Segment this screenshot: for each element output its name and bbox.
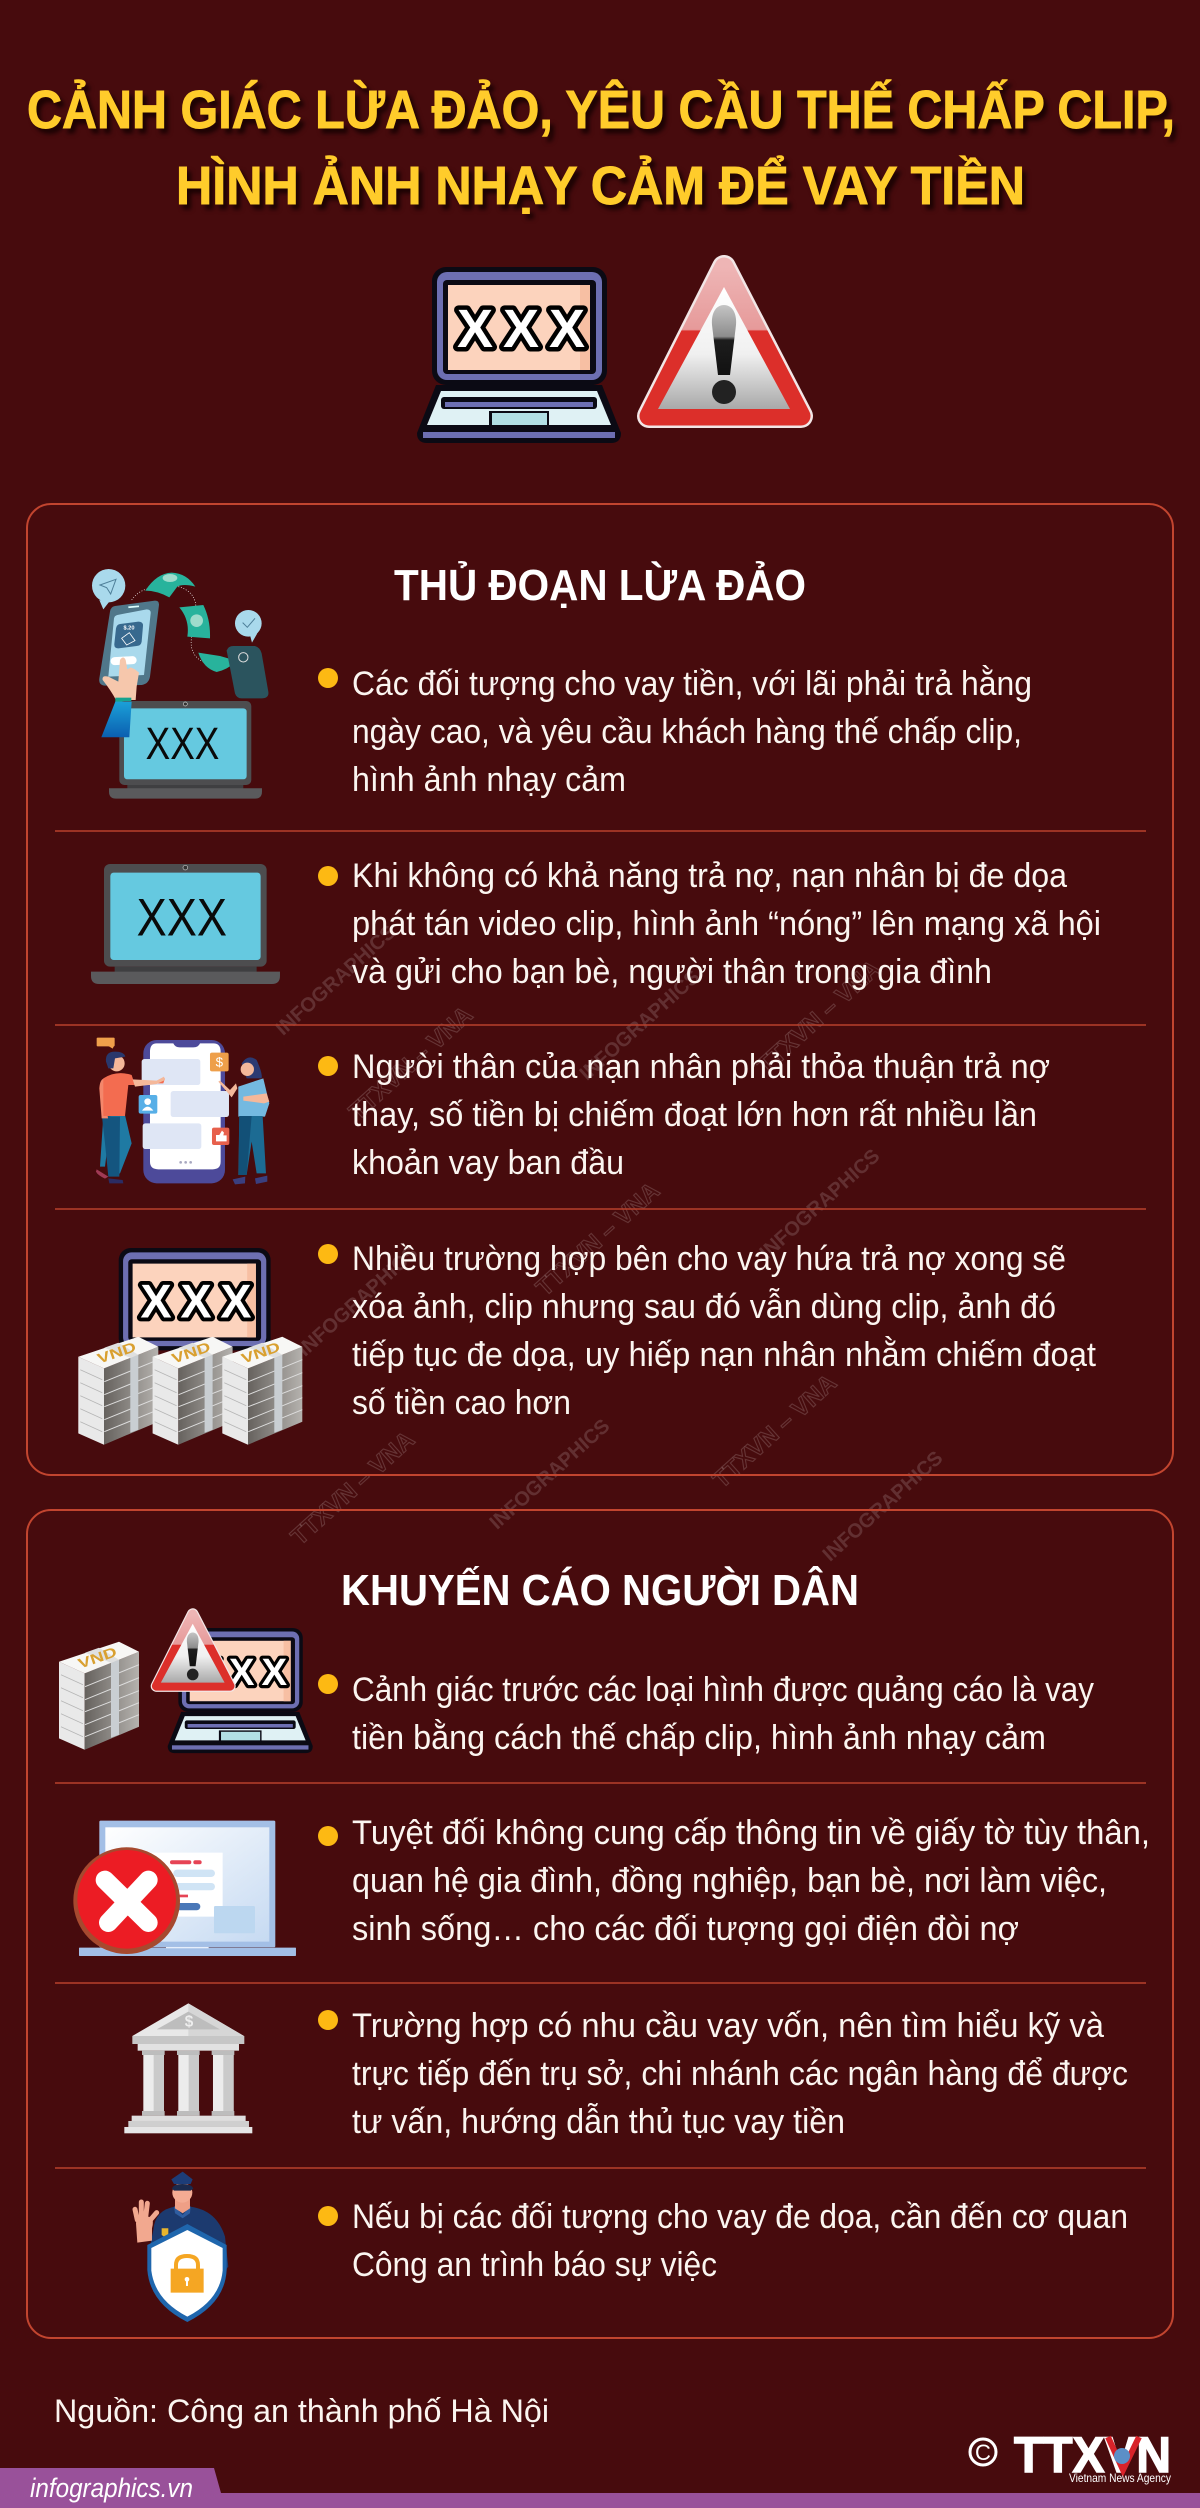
bullet text 4: xóa ảnh, clip nhưng sau đó vẫn dùng clip, ảnh đó (352, 1288, 1056, 1326)
watermarks: TTXVN – VNA (344, 1001, 478, 1126)
watermarks: INFOGRAPHICS (756, 1145, 884, 1264)
logo: TTXVN: Vietnam News Agency (1069, 2471, 1171, 2485)
watermarks: TTXVN – VNA (708, 1369, 842, 1494)
icon: VND stack, laptop and warning: XXX (196, 1651, 288, 1694)
logo: TTXVN: C (975, 2440, 991, 2465)
icon: two people and phone (96, 1038, 269, 1184)
watermarks: TTXVN – VNA (531, 1177, 665, 1302)
bullet text 6: quan hệ gia đình, đồng nghiệp, bạn bè, nơi làm việc, (352, 1862, 1107, 1900)
icon: laptop and VND stacks (78, 1248, 302, 1445)
bullet text 3: khoản vay ban đầu (352, 1144, 624, 1182)
bullet text 7: Trường hợp có nhu cầu vay vốn, nên tìm hiểu kỹ và (352, 2007, 1104, 2045)
bullet text 3: Người thân của nạn nhân phải thỏa thuận trả nợ (352, 1048, 1050, 1086)
watermarks: INFOGRAPHICS (819, 1447, 947, 1566)
icon: laptop with XXX: XXX (457, 299, 585, 359)
bullet text 2: Khi không có khả năng trả nợ, nạn nhân bị đe dọa (352, 857, 1067, 895)
panel: khuyến cáo người dân (27, 1510, 1173, 2338)
icon: laptop form and red cross (73, 1821, 296, 1956)
bullet text 2: và gửi cho bạn bè, người thân trong gia đình (352, 953, 992, 991)
bullet text 4: số tiền cao hơn (352, 1384, 571, 1422)
icon: laptop XXX (91, 864, 280, 984)
watermarks: INFOGRAPHICS (272, 921, 400, 1040)
icon: phone money transfer and laptop: $.20 (123, 626, 134, 632)
bullet text 6 (318, 1814, 1150, 1948)
bullet text 7: trực tiếp đến trụ sở, chi nhánh các ngân hàng để được (352, 2055, 1128, 2093)
bullet text 1 (318, 665, 1032, 799)
bullet text 1: ngày cao, và yêu cầu khách hàng thế chấp clip, (352, 713, 1022, 751)
bullet text 1: hình ảnh nhạy cảm (352, 761, 626, 799)
bullet text 1: Các đối tượng cho vay tiền, với lãi phải trả hằng (352, 665, 1032, 703)
bullet text 7: tư vấn, hướng dẫn thủ tục vay tiền (352, 2103, 845, 2141)
icon: VND stack, laptop and warning (59, 1614, 313, 1753)
icon: laptop and VND stacks: VND (239, 1338, 282, 1367)
heading: khuyến cáo: KHUYẾN CÁO NGƯỜI DÂN (341, 1565, 859, 1615)
icon: laptop XXX: XXX (137, 889, 227, 948)
footer band (0, 2468, 1200, 2508)
bullet text 8 (318, 2198, 1128, 2284)
bullet text 5 (318, 1671, 1094, 1757)
watermarks (272, 921, 947, 1566)
bullet text 5: tiền bằng cách thế chấp clip, hình ảnh nhạy cảm (352, 1719, 1046, 1757)
logo: TTXVN: TTXVN (1014, 2427, 1171, 2483)
icon: phone money transfer and laptop: XXX (146, 718, 219, 769)
icon: laptop and VND stacks: VND (95, 1338, 138, 1367)
icon: laptop and VND stacks: VND (169, 1338, 212, 1367)
bullet text 3: thay, số tiền bị chiếm đoạt lớn hơn rất nhiều lần (352, 1096, 1037, 1134)
bullet text 8: Công an trình báo sự việc (352, 2246, 717, 2284)
heading: thủ đoạn: THỦ ĐOẠN LỪA ĐẢO (394, 559, 806, 610)
watermarks: INFOGRAPHICS (486, 1415, 614, 1534)
bullet text 4 (318, 1240, 1097, 1422)
bullet text 2: phát tán video clip, hình ảnh “nóng” lên mạng xã hội (352, 905, 1101, 943)
bullet text 8: Nếu bị các đối tượng cho vay đe dọa, cần đến cơ quan (352, 2198, 1128, 2236)
watermarks: TTXVN – VNA (286, 1426, 420, 1551)
watermarks: INFOGRAPHICS (294, 1242, 422, 1361)
icon: two people and phone: $ (216, 1055, 224, 1070)
title (27, 79, 1175, 216)
icon: laptop with XXX (417, 267, 621, 443)
icon: warning triangle (649, 267, 801, 416)
bullet text 6: sinh sống… cho các đối tượng gọi điện đòi nợ (352, 1910, 1019, 1948)
bullet text 5: Cảnh giác trước các loại hình được quảng cáo là vay (352, 1671, 1094, 1709)
panel: thủ đoạn lừa đảo (27, 504, 1173, 1475)
source note: Nguồn: Công an thành phố Hà Nội (54, 2393, 549, 2429)
watermarks: INFOGRAPHICS (576, 966, 704, 1085)
title: HÌNH ẢNH NHẠY CẢM ĐỂ VAY TIỀN (176, 156, 1025, 216)
icon: bank: $ (185, 2014, 194, 2031)
bullet text 7 (318, 2007, 1128, 2141)
bullet text 3 (318, 1048, 1050, 1182)
icon: VND stack, laptop and warning: VND (76, 1643, 119, 1672)
icon: bank (124, 2003, 252, 2133)
footer band: infographics.vn (30, 2473, 193, 2503)
bullet text 4: Nhiều trường hợp bên cho vay hứa trả nợ xong sẽ (352, 1240, 1066, 1278)
bullet text 6: Tuyệt đối không cung cấp thông tin về giấy tờ tùy thân, (352, 1814, 1150, 1852)
icon: police with shield (135, 2172, 228, 2322)
watermarks: TTXVN – VNA (752, 955, 886, 1080)
bullet text 4: tiếp tục đe dọa, uy hiếp nạn nhân nhằm chiếm đoạt (352, 1336, 1097, 1374)
bullet text 2 (318, 857, 1101, 991)
icon: laptop and VND stacks: XXX (140, 1275, 252, 1327)
icon: phone money transfer and laptop (92, 569, 268, 799)
